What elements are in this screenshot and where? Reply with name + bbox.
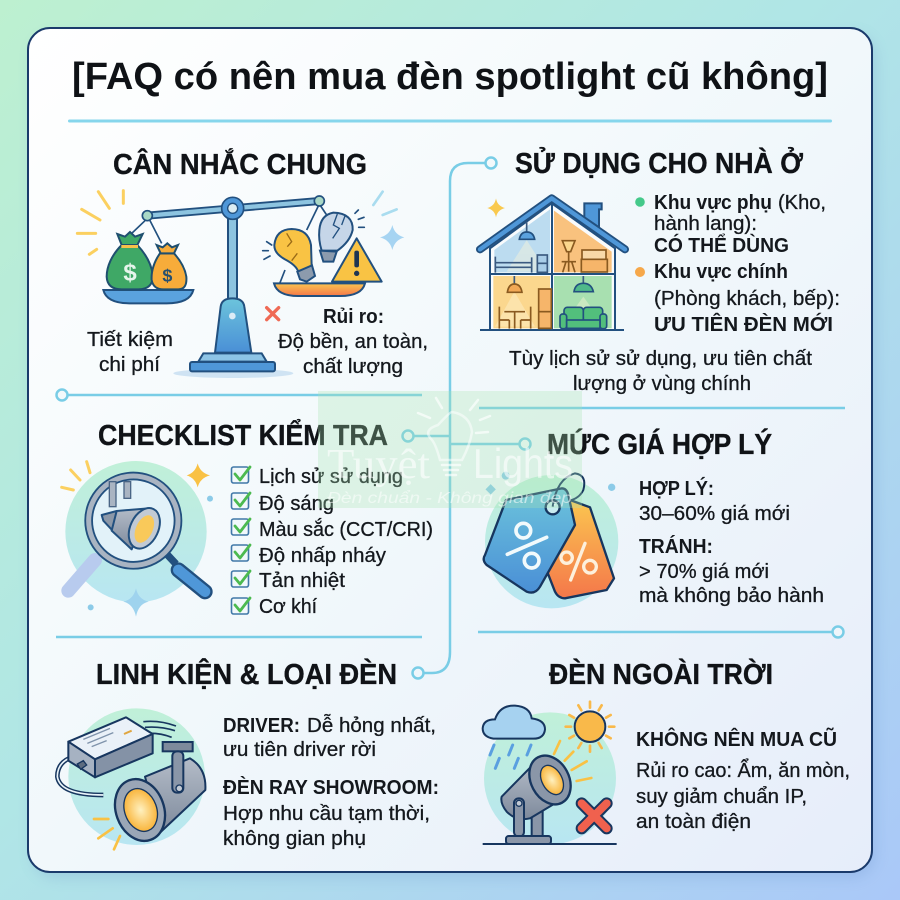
text: usage note: lượng ở vùng chính: [573, 372, 751, 395]
heading: checklist kiểm tra: CHECKLIST KIỂM TRA: [98, 420, 388, 452]
text: usage bullets: [635, 191, 840, 336]
text: rủi ro: chất lượng: [303, 355, 403, 378]
icon: outdoor light with weather: [483, 702, 617, 844]
heading: sử dụng cho nhà ở: SỬ DỤNG CHO NHÀ Ở: [515, 147, 804, 180]
panel: checklist kiểm tra: [62, 420, 433, 618]
text: usage bullets: Khu vực chính: [654, 260, 788, 283]
connector lines: [56, 158, 845, 678]
list: checklist items: Cơ khí: [259, 595, 317, 618]
watermark: [318, 391, 582, 508]
text: price guidance: 30–60% giá mới: [639, 502, 790, 525]
text: usage bullets: CÓ THỂ DÙNG: [654, 233, 789, 257]
text: rủi ro: Rủi ro:: [323, 305, 384, 328]
icon: price tags: [484, 472, 618, 608]
text: price guidance: mà không bảo hành: [639, 584, 824, 607]
text: outdoor warning: KHÔNG NÊN MUA CŨ: [636, 727, 837, 751]
text: driver and showroom notes: DRIVER:: [223, 714, 300, 737]
panel: đèn ngoài trời: [483, 659, 850, 844]
heading: đèn ngoài trời: ĐÈN NGOÀI TRỜI: [549, 659, 773, 691]
list: checklist items: Lịch sử sử dụng: [259, 465, 403, 488]
panel: linh kiện và loại đèn: [57, 659, 439, 850]
icon: balance scale: [77, 191, 404, 378]
text: price guidance: [639, 476, 824, 607]
icon: balance scale: $: [123, 260, 137, 287]
text: outdoor warning: Rủi ro cao: Ẩm, ăn mòn,: [636, 759, 850, 782]
watermark: Đèn chuẩn - Không gian đẹp: [327, 489, 572, 507]
panel: cân nhắc chung: [77, 149, 428, 378]
text: tiết kiệm chi phí: chi phí: [99, 353, 160, 376]
icon: driver and track light: [57, 708, 205, 849]
text: driver and showroom notes: [223, 714, 439, 850]
heading: cân nhắc chung: CÂN NHẮC CHUNG: [113, 149, 367, 181]
text: driver and showroom notes: ưu tiên driver rời: [223, 738, 376, 761]
heading: linh kiện và loại đèn: LINH KIỆN & LOẠI ĐÈN: [96, 659, 397, 691]
panel: sử dụng cho nhà ở: [480, 147, 840, 395]
text: outdoor warning: [636, 727, 850, 833]
text: usage note: Tùy lịch sử sử dụng, ưu tiên chất: [509, 347, 812, 370]
panel: mức giá hợp lý: [484, 429, 824, 608]
text: price guidance: > 70% giá mới: [639, 560, 769, 583]
text: outdoor warning: an toàn điện: [636, 810, 751, 833]
watermark: Lights: [473, 440, 573, 487]
text: rủi ro: Độ bền, an toàn,: [278, 330, 428, 353]
text: driver and showroom notes: Dễ hỏng nhất,: [307, 714, 436, 737]
text: outdoor warning: suy giảm chuẩn IP,: [636, 785, 807, 808]
text: driver and showroom notes: không gian phụ: [223, 827, 366, 850]
title: [FAQ có nên mua đèn spotlight cũ không]: [72, 56, 828, 98]
watermark: Tuyệt: [327, 442, 430, 488]
text: tiết kiệm chi phí: [87, 328, 173, 376]
text: usage bullets: (Kho,: [778, 191, 826, 214]
icon: magnifier over spotlight: [62, 461, 213, 617]
text: usage bullets: Khu vực phụ: [654, 191, 772, 214]
list: checklist items: Tản nhiệt: [259, 569, 345, 592]
list: checklist items: Độ sáng: [259, 492, 334, 515]
text: tiết kiệm chi phí: Tiết kiệm: [87, 328, 173, 351]
text: price guidance: TRÁNH:: [639, 535, 713, 558]
icon: balance scale: $: [162, 266, 172, 286]
text: price guidance: HỢP LÝ:: [639, 476, 714, 500]
text: rủi ro: [278, 305, 428, 378]
text: usage note: [509, 347, 812, 395]
text: driver and showroom notes: Hợp nhu cầu tạm thời,: [223, 802, 430, 825]
text: usage bullets: hành lang):: [654, 212, 757, 235]
checkbox icons: [232, 467, 248, 614]
text: usage bullets: (Phòng khách, bếp):: [654, 287, 840, 310]
icon: house cross-section: [480, 198, 625, 330]
heading: mức giá hợp lý: MỨC GIÁ HỢP LÝ: [547, 429, 772, 461]
text: usage bullets: ƯU TIÊN ĐÈN MỚI: [654, 312, 833, 336]
list: checklist items: Màu sắc (CCT/CRI): [259, 518, 433, 541]
list: checklist items: [232, 465, 433, 618]
text: driver and showroom notes: ĐÈN RAY SHOWROOM:: [223, 776, 439, 799]
list: checklist items: Độ nhấp nháy: [259, 544, 387, 567]
